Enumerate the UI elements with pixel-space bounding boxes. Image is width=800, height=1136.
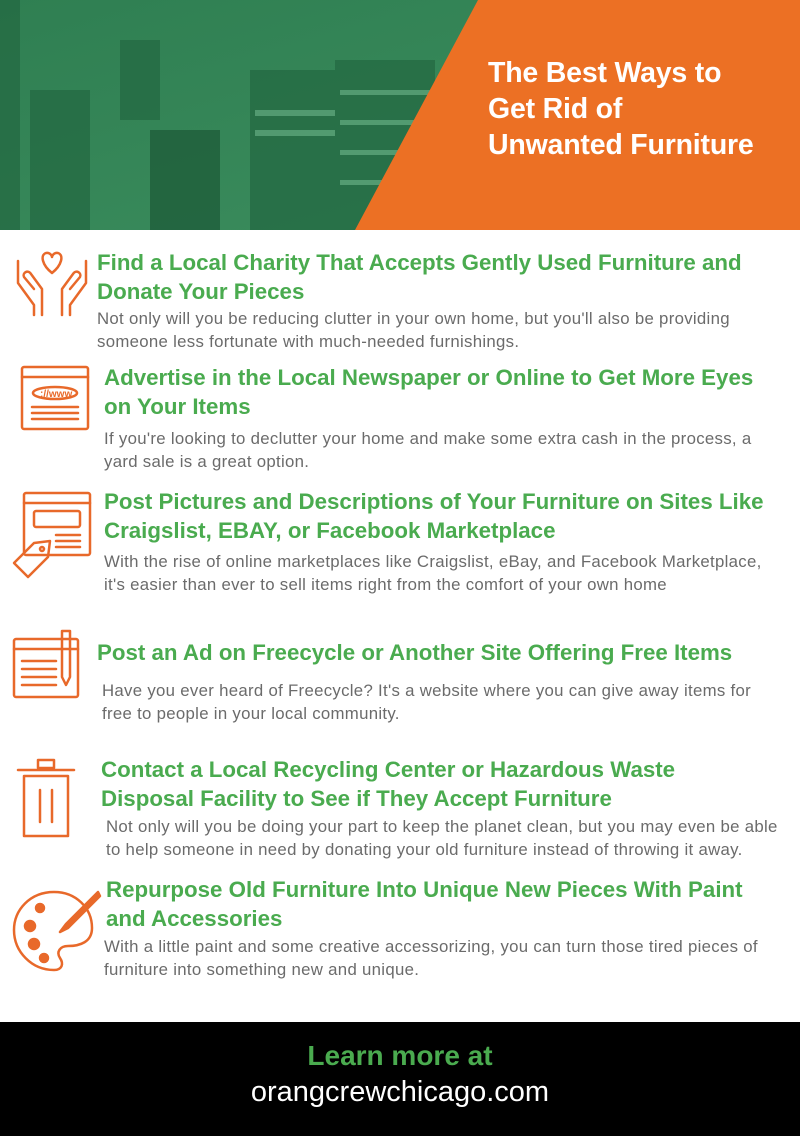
icon: page with pencil bbox=[12, 630, 80, 698]
heading: Advertise in the Local Newspaper or Online to Get More Eyes bbox=[104, 365, 753, 390]
header banner bbox=[0, 0, 800, 230]
heading bbox=[97, 250, 742, 304]
item 4 bbox=[12, 630, 751, 723]
body text: With a little paint and some creative accessorizing, you can turn those tired pieces of bbox=[104, 937, 758, 956]
heading: Repurpose Old Furniture Into Unique New Pieces With Paint bbox=[106, 877, 743, 902]
body text: someone less fortunate with much-needed furnishings. bbox=[97, 332, 519, 351]
body text bbox=[104, 937, 758, 979]
footer heading: Learn more at bbox=[307, 1040, 493, 1071]
item 3 bbox=[12, 489, 764, 594]
icon: page with tag bbox=[12, 492, 92, 578]
item 1 bbox=[16, 250, 742, 351]
heading: Post Pictures and Descriptions of Your Furniture on Sites Like bbox=[104, 489, 764, 514]
body text: If you're looking to declutter your home and make some extra cash in the process, a bbox=[104, 429, 751, 448]
heading: Find a Local Charity That Accepts Gently Used Furniture and bbox=[97, 250, 742, 275]
body text: With the rise of online marketplaces like Craigslist, eBay, and Facebook Marketplace, bbox=[104, 552, 762, 571]
item 5 bbox=[16, 757, 778, 859]
body text: to help someone in need by donating your old furniture instead of throwing it away. bbox=[106, 840, 743, 859]
heading bbox=[101, 757, 675, 811]
body text bbox=[97, 309, 730, 351]
footer bbox=[0, 1022, 800, 1136]
title: Unwanted Furniture bbox=[488, 129, 754, 161]
heading: on Your Items bbox=[104, 394, 251, 419]
icon: heart hands bbox=[16, 252, 88, 316]
item 6 bbox=[12, 877, 758, 979]
heading: Post an Ad on Freecycle or Another Site Offering Free Items bbox=[97, 640, 732, 665]
body text: yard sale is a great option. bbox=[104, 452, 309, 471]
heading bbox=[106, 877, 743, 931]
body text: Not only will you be reducing clutter in your own home, but you'll also be providing bbox=[97, 309, 730, 328]
icon: trash can bbox=[16, 758, 76, 838]
title: The Best Ways to bbox=[488, 57, 721, 89]
body text bbox=[106, 817, 778, 859]
heading bbox=[104, 489, 764, 543]
icon: web page bbox=[20, 366, 90, 430]
body text: free to people in your local community. bbox=[102, 704, 400, 723]
item 2 bbox=[20, 365, 753, 471]
heading: Donate Your Pieces bbox=[97, 279, 304, 304]
title bbox=[488, 57, 754, 161]
body text bbox=[102, 681, 751, 723]
heading: Contact a Local Recycling Center or Hazardous Waste bbox=[101, 757, 675, 782]
title: Get Rid of bbox=[488, 93, 622, 125]
orange title panel bbox=[355, 0, 800, 230]
body text: furniture into something new and unique. bbox=[104, 960, 419, 979]
icon: paint palette bbox=[12, 890, 102, 972]
heading: Craigslist, EBAY, or Facebook Marketplace bbox=[104, 518, 555, 543]
heading: Disposal Facility to See if They Accept Furniture bbox=[101, 786, 612, 811]
heading bbox=[104, 365, 753, 419]
body text: it's easier than ever to sell items right from the comfort of your own home bbox=[104, 575, 667, 594]
body text: Have you ever heard of Freecycle? It's a website where you can give away items for bbox=[102, 681, 751, 700]
icon: web page: ://www bbox=[40, 389, 72, 400]
body text: Not only will you be doing your part to keep the planet clean, but you may even be able bbox=[106, 817, 778, 836]
heading: and Accessories bbox=[106, 906, 282, 931]
body text bbox=[104, 552, 762, 594]
body text bbox=[104, 429, 752, 471]
footer url: orangcrewchicago.com bbox=[251, 1076, 549, 1108]
